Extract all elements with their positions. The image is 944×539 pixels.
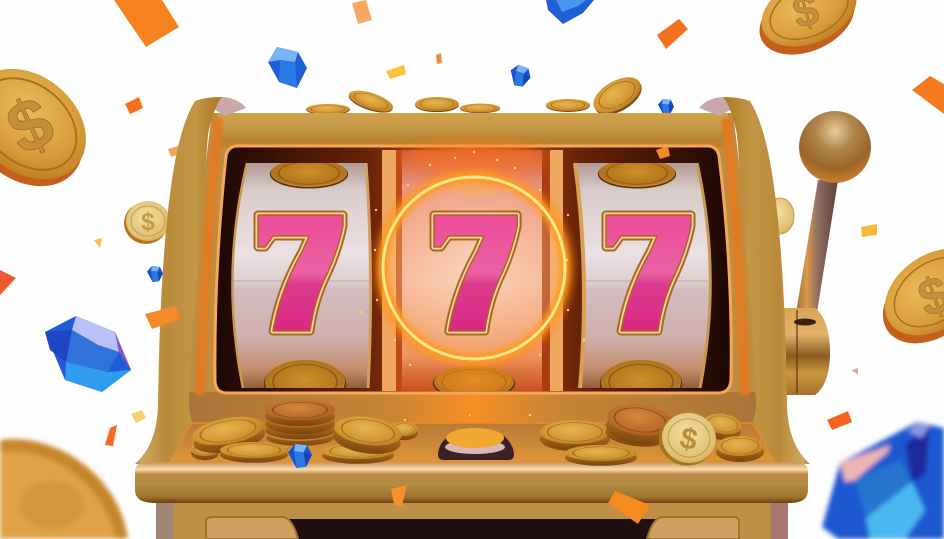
sparks bbox=[360, 151, 586, 421]
base left panel bbox=[206, 517, 298, 539]
coin on centre reel top bbox=[449, 182, 499, 196]
base slot bbox=[275, 519, 670, 539]
coin: top right bbox=[748, 0, 868, 69]
lever arm bbox=[794, 180, 838, 325]
upright coin: $ bbox=[677, 422, 701, 457]
spin button bbox=[438, 428, 514, 460]
reel left bbox=[231, 162, 372, 388]
coin piles in tray bbox=[190, 400, 764, 471]
window bbox=[215, 146, 731, 393]
gem: small on machine bbox=[658, 99, 674, 115]
coin on left reel top bbox=[270, 163, 348, 188]
machine cabinet bbox=[135, 97, 810, 539]
reel right bbox=[573, 162, 712, 388]
coins on top of machine bbox=[306, 70, 648, 122]
seven left bbox=[258, 215, 343, 331]
upright coin bbox=[654, 407, 721, 471]
base right panel bbox=[647, 517, 739, 539]
coin: behind right side bbox=[766, 198, 794, 234]
coin: top left large bbox=[0, 46, 108, 209]
tray recess bbox=[168, 423, 778, 462]
lever bbox=[783, 111, 871, 395]
coin on right reel bottom bbox=[600, 360, 682, 388]
coin on centre reel bottom bbox=[432, 366, 516, 391]
seven centre bbox=[434, 215, 517, 331]
glowing ring bbox=[383, 177, 565, 359]
gem: left large bbox=[45, 316, 131, 392]
left pile bbox=[190, 400, 418, 464]
coin on left reel bottom bbox=[264, 360, 346, 388]
gem: top centre-left bbox=[268, 47, 307, 88]
coin on right reel top bbox=[598, 163, 676, 188]
gem in tray bbox=[288, 444, 312, 468]
orange strips bbox=[200, 118, 219, 395]
gem: bottom right large bbox=[822, 422, 944, 539]
reel centre bbox=[396, 150, 550, 400]
gem: small left bbox=[147, 266, 163, 282]
tray lip bbox=[135, 462, 808, 503]
body back bbox=[172, 113, 772, 430]
coin: right bbox=[867, 231, 944, 361]
gem: top bbox=[546, 0, 594, 24]
top sparkle glow bbox=[404, 140, 544, 176]
seven right bbox=[606, 215, 691, 331]
glow behind ring bbox=[368, 162, 580, 374]
back panel bbox=[185, 392, 760, 426]
coin: bottom left blurred bbox=[0, 439, 128, 539]
right pile bbox=[540, 401, 764, 466]
left side arch bbox=[135, 97, 246, 464]
base bbox=[156, 500, 788, 539]
top bar bbox=[218, 113, 728, 147]
right side arch bbox=[699, 97, 810, 464]
coin: left small: $ bbox=[141, 208, 155, 236]
lever hub bbox=[783, 308, 830, 395]
divider left bbox=[382, 150, 396, 391]
divider right bbox=[550, 150, 563, 391]
lever ball bbox=[799, 111, 871, 183]
coin: left small bbox=[124, 201, 170, 244]
confetti over machine bbox=[145, 146, 670, 524]
gem: small top bbox=[507, 63, 533, 89]
